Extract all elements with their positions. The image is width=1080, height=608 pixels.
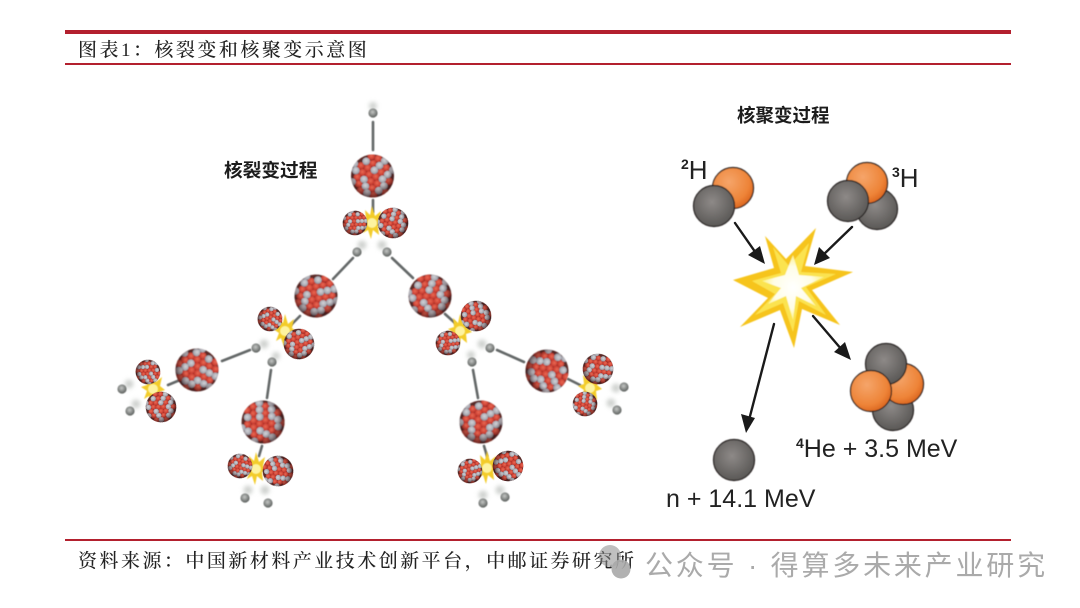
deuterium 2H [694, 168, 754, 226]
label: n + 14.1 MeV: n + 14.1 MeV [666, 485, 816, 513]
label: 2H: 2 [681, 156, 689, 172]
source note: 资料来源：中国新材料产业技术创新平台，中邮证券研究所 [78, 551, 636, 572]
footer rule [65, 539, 1011, 541]
large nuclei [155, 148, 585, 468]
fusion diagram [666, 105, 958, 513]
fission fragments [127, 196, 626, 500]
stars: fission flashes [141, 206, 602, 485]
fission diagram [117, 102, 629, 508]
header bottom rule [65, 63, 1011, 65]
title: 图表1：核裂变和核聚变示意图 [78, 40, 369, 61]
star: fusion flash [733, 228, 853, 348]
neutron n [714, 440, 754, 480]
tritium 3H [828, 162, 898, 230]
label: 4He + 3.5 MeV: 4 [796, 435, 804, 451]
label: 3H: H [900, 163, 919, 193]
label: 4He + 3.5 MeV: He + 3.5 MeV [804, 435, 958, 463]
watermark text: 公众号 · 得算多未来产业研究 [645, 550, 1048, 581]
fusion arrows [735, 223, 852, 433]
neutron tails [124, 102, 620, 500]
label: 2H: H [689, 155, 708, 185]
header top rule [65, 30, 1011, 34]
label: 3H: 3 [892, 164, 900, 180]
neutrons [117, 108, 629, 508]
heading: fusion process: 核聚变过程 [737, 105, 830, 126]
helium 4He [850, 344, 924, 430]
fission arrows [168, 122, 580, 456]
heading: fission process: 核裂变过程 [224, 160, 318, 181]
